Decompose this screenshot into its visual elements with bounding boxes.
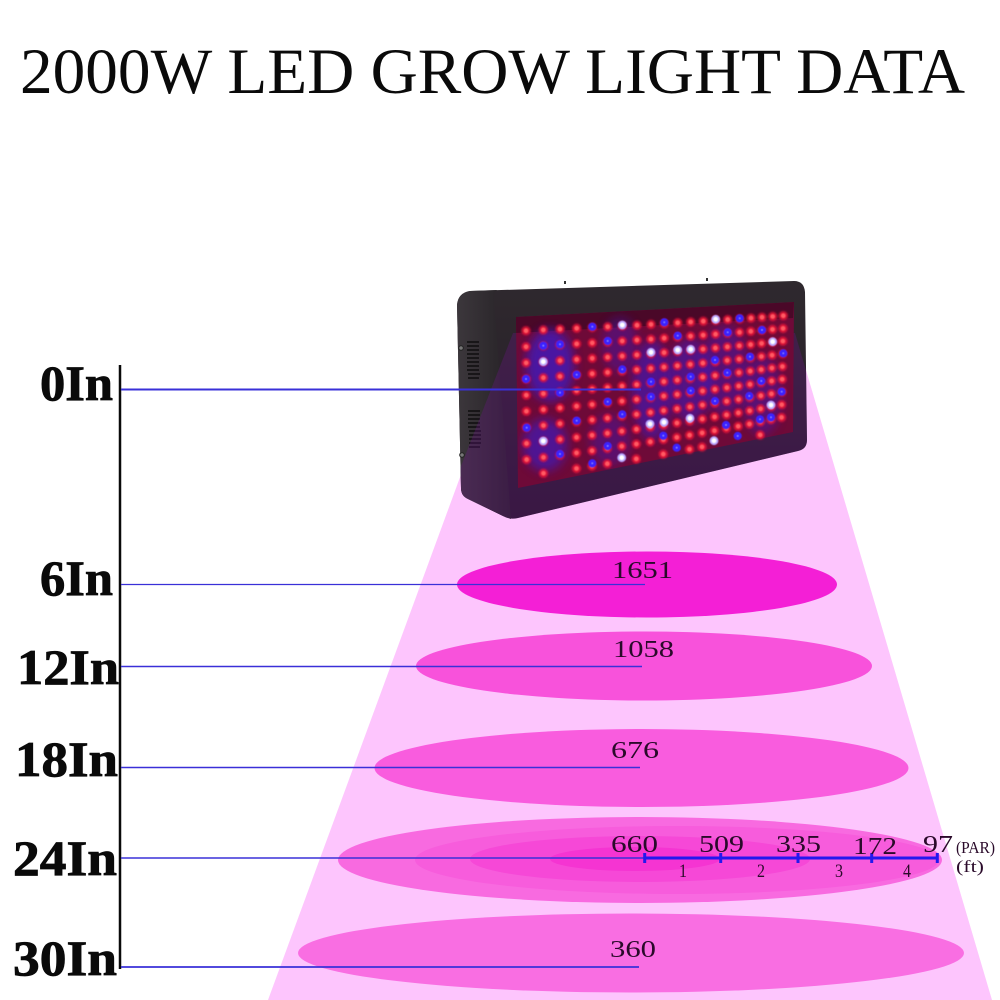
depth labels bbox=[13, 355, 119, 986]
unit: ft: (ft) bbox=[956, 857, 984, 876]
LED panel bbox=[516, 302, 794, 488]
ellipse group: 24In bbox=[338, 817, 942, 903]
blue LEDs bbox=[524, 316, 786, 466]
label: 30In: 30In bbox=[13, 930, 117, 986]
label: 24In: 24In bbox=[13, 830, 117, 886]
LED grow light lamp bbox=[457, 278, 807, 519]
distance: 2: 2 bbox=[757, 861, 765, 882]
panel glow bbox=[516, 302, 794, 471]
value: 97: 97 bbox=[923, 832, 953, 858]
value: 1058: 1058 bbox=[613, 637, 674, 663]
label: 18In: 18In bbox=[15, 731, 118, 787]
ellipse: 18In bbox=[374, 729, 908, 807]
PAR values bbox=[610, 558, 674, 963]
24In distance scale bbox=[611, 832, 995, 882]
vertical depth axis bbox=[119, 365, 121, 969]
lamp housing bbox=[457, 281, 807, 519]
red LED cores bbox=[526, 316, 783, 476]
title: 2000W LED GROW LIGHT DATA bbox=[20, 36, 965, 108]
value: 360: 360 bbox=[610, 937, 656, 963]
value: 676: 676 bbox=[611, 738, 659, 764]
unit: PAR: (PAR) bbox=[956, 838, 995, 857]
ellipse: 6In bbox=[457, 552, 837, 618]
distance: 1: 1 bbox=[679, 861, 687, 882]
value: 1651: 1651 bbox=[612, 558, 673, 584]
white LEDs bbox=[540, 316, 776, 461]
red LED halos bbox=[526, 316, 783, 476]
light beam bbox=[268, 333, 992, 1000]
value: 172: 172 bbox=[853, 834, 897, 860]
leader lines bbox=[121, 390, 645, 967]
value: 509: 509 bbox=[699, 832, 744, 858]
value: 335: 335 bbox=[776, 832, 821, 858]
label: 0In: 0In bbox=[40, 355, 113, 411]
value: 660: 660 bbox=[611, 832, 658, 858]
ellipse: 30In bbox=[298, 914, 964, 992]
label: 12In: 12In bbox=[17, 639, 119, 695]
lamp side bbox=[457, 290, 511, 519]
ellipse: 12In bbox=[416, 632, 872, 700]
scale line bbox=[645, 856, 937, 860]
beam tint on lamp bbox=[460, 333, 807, 519]
distance: 3: 3 bbox=[835, 861, 843, 882]
label: 6In: 6In bbox=[40, 550, 113, 606]
hanging studs bbox=[564, 278, 708, 284]
side vents bbox=[467, 342, 481, 447]
side screws bbox=[459, 346, 464, 457]
scale ticks bbox=[645, 853, 937, 863]
distance: 4: 4 bbox=[903, 861, 911, 882]
